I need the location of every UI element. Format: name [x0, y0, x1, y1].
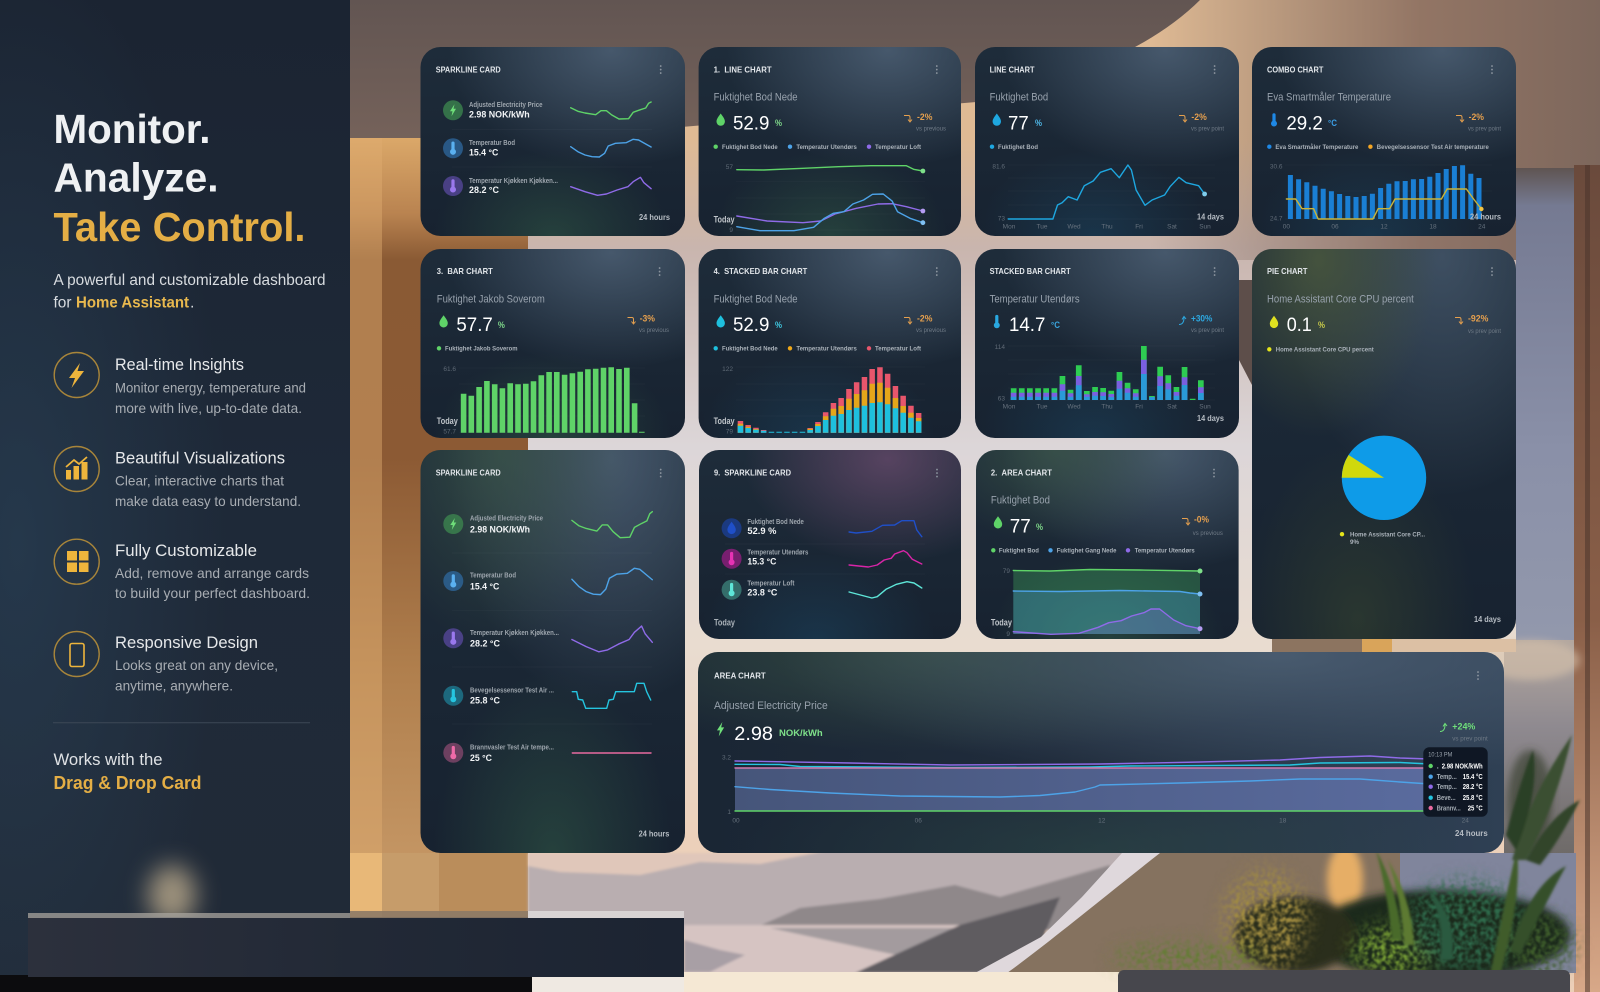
stacked bar chart: Tue	[1037, 404, 1048, 411]
feature: responsive design	[54, 632, 278, 694]
combo chart: 12	[1380, 223, 1388, 230]
footer: 24 hours	[639, 829, 670, 839]
legend: Fuktighet Gang Nede	[1057, 548, 1117, 555]
menu	[660, 470, 662, 477]
area chart: Today	[991, 617, 1012, 627]
heading: PIE CHART	[1267, 266, 1308, 276]
tooltip: Brannv...	[1437, 805, 1461, 812]
feature: fully customizable: Fully Customizable	[115, 541, 257, 560]
stacked bar chart: Mon	[1003, 404, 1016, 411]
stacked bar chart: Today	[714, 416, 735, 426]
row: brannvasler: 25 °C	[470, 753, 492, 764]
trend: vs prev point	[1452, 736, 1488, 743]
menu	[1477, 672, 1479, 679]
menu	[936, 268, 938, 275]
trend: vs prev point	[1468, 328, 1501, 335]
name: Fuktighet Bod Nede	[714, 92, 798, 104]
value: °C	[1051, 320, 1060, 330]
legend: Fuktighet Bod Nede	[722, 144, 778, 151]
name: Home Assistant Core CPU percent	[1267, 293, 1414, 305]
heading: LINE CHART	[990, 64, 1035, 74]
value: %	[498, 320, 505, 330]
panel: tall sparkline card	[420, 450, 685, 853]
heading: 9. SPARKLINE CARD	[714, 468, 791, 478]
feature: beautiful visualizations	[54, 446, 301, 509]
value	[1271, 113, 1337, 134]
legend	[714, 346, 922, 353]
value: %	[775, 118, 782, 128]
stacked bar chart	[714, 366, 925, 436]
heading	[54, 106, 306, 250]
row: temperature bod	[443, 568, 652, 595]
line chart: 9	[729, 227, 733, 234]
trend	[1455, 314, 1501, 335]
legend: Fuktighet Bod	[998, 144, 1038, 151]
feature: beautiful visualizations: make data easy to understand.	[115, 493, 301, 509]
value	[1270, 315, 1325, 336]
row: temperatur utendørs	[722, 549, 922, 569]
area chart: 79	[1003, 568, 1010, 575]
row: brannvasler	[443, 743, 651, 764]
stacked bar chart: 122	[722, 366, 733, 373]
row: electricity: Adjusted Electricity Price	[470, 516, 543, 523]
heading: COMBO CHART	[1267, 64, 1324, 74]
subheading	[54, 272, 326, 312]
works with: Works with the	[54, 750, 162, 769]
footer: 24 hours	[1470, 211, 1501, 221]
feature: fully customizable: Add, remove and arrange cards	[115, 565, 309, 581]
trend: vs previous	[1193, 530, 1223, 537]
trend: -2%	[917, 112, 933, 123]
combo chart: 06	[1331, 223, 1339, 230]
legend	[714, 144, 922, 151]
feature: responsive design: anytime, anywhere.	[115, 678, 233, 694]
legend	[1267, 143, 1489, 151]
panel: wide area chart	[698, 652, 1504, 853]
trend: -2%	[1191, 112, 1207, 123]
line chart: Fri	[1135, 223, 1143, 230]
footer: 24 hours	[639, 212, 670, 222]
value: 77	[1008, 113, 1029, 134]
legend: Eva Smartmåler Temperature	[1275, 143, 1359, 151]
value	[439, 315, 505, 336]
feature: real-time insights	[54, 352, 306, 416]
menu	[936, 66, 938, 73]
row: temperatur utendørs: 15.3 °C	[747, 557, 777, 568]
row: temperatur loft: 23.8 °C	[747, 588, 778, 599]
menu	[1214, 268, 1216, 275]
value: 52.9	[733, 315, 769, 336]
legend: Temperatur Utendørs	[796, 346, 857, 353]
row: temperature kjøkken: 28.2 °C	[470, 638, 500, 649]
legend: Temperatur Utendørs	[796, 144, 857, 151]
value: %	[1036, 522, 1043, 532]
value: 14.7	[1009, 315, 1045, 336]
name: Fuktighet Bod	[991, 494, 1050, 506]
trend: -92%	[1468, 314, 1489, 325]
value: %	[1035, 118, 1042, 128]
value: 0.1	[1287, 315, 1312, 336]
line chart	[714, 164, 925, 234]
name: Fuktighet Bod	[990, 92, 1048, 104]
area chart: 00	[732, 818, 740, 825]
feature: fully customizable	[54, 539, 310, 601]
combo chart: 18	[1429, 223, 1437, 230]
feature: real-time insights: more with live, up-to-date data.	[115, 400, 302, 416]
tooltip: 28.2 °C	[1463, 783, 1483, 791]
trend	[1179, 314, 1224, 334]
legend: Home Assistant Core CPU percent	[1276, 347, 1374, 354]
value	[717, 722, 823, 745]
legend: Temperatur Utendørs	[1135, 548, 1195, 555]
name: Fuktighet Jakob Soverom	[437, 293, 545, 305]
legend	[991, 548, 1195, 555]
counter block	[28, 911, 684, 977]
stacked bar chart: 114	[995, 344, 1005, 351]
tooltip: .	[1437, 763, 1439, 770]
stacked bar chart: Wed	[1067, 404, 1081, 411]
heading: 2. AREA CHART	[991, 468, 1053, 478]
row: temperatur loft: Temperatur Loft	[747, 581, 795, 588]
row: temperature bod: Temperatur Bod	[470, 573, 516, 580]
heading: Analyze.	[54, 155, 218, 201]
works with: Drag & Drop Card	[54, 773, 202, 793]
line chart: Thu	[1101, 223, 1113, 230]
name: Eva Smartmåler Temperature	[1267, 92, 1391, 104]
row: temperatur loft	[722, 580, 922, 600]
trend: vs previous	[916, 125, 947, 132]
trend: -0%	[1194, 515, 1209, 526]
value	[993, 113, 1042, 134]
row: temperature kjøkken	[443, 626, 652, 652]
panel: 1. line chart	[699, 47, 961, 236]
feature: beautiful visualizations: Beautiful Visualizations	[115, 448, 285, 467]
value: 29.2	[1286, 113, 1323, 134]
combo chart: 00	[1283, 223, 1290, 230]
value: %	[775, 320, 782, 330]
line chart: Mon	[1003, 223, 1016, 230]
footer: Today	[714, 617, 735, 627]
feature: responsive design: Looks great on any device,	[115, 657, 278, 673]
value	[716, 113, 782, 134]
menu	[660, 66, 662, 73]
panel: line chart	[975, 47, 1239, 236]
footer: 14 days	[1474, 614, 1501, 624]
plants	[1112, 735, 1580, 992]
legend: Fuktighet Bod Nede	[722, 346, 778, 353]
feature: real-time insights: Real-time Insights	[115, 355, 244, 374]
subheading: Home Assistant	[76, 295, 190, 312]
tooltip: Temp...	[1437, 774, 1457, 781]
value: 77	[1010, 517, 1031, 538]
trend: vs previous	[639, 327, 670, 334]
area chart: 18	[1279, 818, 1287, 825]
trend: vs prev point	[1191, 327, 1224, 334]
row: temperature kjøkken: Temperatur Kjøkken Kjøkken...	[470, 630, 559, 637]
row: electricity	[443, 512, 652, 538]
tooltip: 10:13 PM	[1428, 752, 1452, 759]
area chart: 24	[1462, 818, 1469, 825]
trend	[904, 314, 947, 334]
line chart: 57	[726, 164, 733, 171]
feature: responsive design: Responsive Design	[115, 633, 258, 652]
area chart: 3.2	[722, 754, 731, 762]
bar chart: 61.6	[443, 366, 456, 373]
trend: -2%	[917, 314, 933, 325]
tooltip: 2.98 NOK/kWh	[1442, 763, 1483, 770]
menu	[1213, 470, 1215, 477]
area chart: 1	[727, 809, 731, 816]
works with	[54, 750, 202, 793]
menu	[1491, 66, 1493, 73]
row: temperature bod: 15.4 °C	[470, 581, 499, 592]
trend: vs prev point	[1191, 125, 1224, 132]
name: Adjusted Electricity Price	[714, 700, 828, 712]
stacked bar chart: 79	[726, 428, 733, 436]
stacked bar chart	[995, 344, 1215, 411]
value: 2.98	[734, 724, 773, 745]
trend	[1456, 112, 1501, 132]
heading: 3. BAR CHART	[437, 266, 494, 276]
value	[716, 315, 782, 336]
stacked bar chart: Thu	[1101, 404, 1113, 411]
name: Temperatur Utendørs	[990, 293, 1080, 305]
line chart: Sun	[1199, 223, 1211, 230]
heading: STACKED BAR CHART	[990, 266, 1071, 276]
combo chart: 24.7	[1270, 216, 1283, 222]
subheading: A powerful and customizable dashboard	[54, 272, 326, 289]
legend: Temperatur Loft	[875, 144, 922, 151]
trend	[1182, 515, 1223, 537]
heading: Monitor.	[54, 106, 210, 152]
row: temperature kjøkken	[443, 176, 651, 196]
panel: 2. area chart	[976, 450, 1239, 639]
row: fuktighet: 52.9 %	[747, 526, 777, 537]
stacked bar chart: Fri	[1135, 404, 1143, 411]
footer: 14 days	[1197, 413, 1224, 423]
heading: SPARKLINE CARD	[436, 64, 501, 74]
legend: Fuktighet Bod	[999, 548, 1039, 555]
heading: AREA CHART	[714, 670, 766, 680]
value: %	[1318, 320, 1325, 330]
row: brannvasler: Brannvasler Test Air tempe...	[470, 744, 554, 751]
heading: 4. STACKED BAR CHART	[714, 266, 808, 276]
line chart: Today	[714, 214, 735, 224]
heading: 1. LINE CHART	[714, 64, 772, 74]
left panel	[0, 0, 684, 992]
row: temperatur utendørs: Temperatur Utendørs	[747, 550, 808, 557]
combo chart: 30.6	[1270, 164, 1283, 170]
combo chart	[1270, 164, 1492, 230]
name: Fuktighet Bod Nede	[714, 293, 798, 305]
pie chart	[1342, 436, 1426, 520]
area chart: 9	[1006, 631, 1010, 638]
row: electricity: 2.98 NOK/kWh	[469, 110, 530, 121]
combo chart: 24	[1478, 223, 1486, 230]
value: 52.9	[733, 113, 769, 134]
subheading: .	[190, 295, 194, 312]
feature: fully customizable: to build your perfect dashboard.	[115, 585, 310, 601]
line chart	[992, 164, 1215, 230]
panel: pie chart	[1252, 249, 1516, 639]
feature: beautiful visualizations: Clear, interactive charts that	[115, 473, 284, 489]
footer: 14 days	[1197, 211, 1224, 221]
bar chart	[437, 366, 645, 436]
footer: 24 hours	[1455, 828, 1488, 838]
bar chart: Today	[437, 416, 458, 426]
row: temperature bod: Temperatur Bod	[469, 140, 515, 147]
row: fuktighet	[722, 518, 922, 538]
menu	[1214, 66, 1216, 73]
tooltip: 25 °C	[1468, 804, 1483, 812]
area chart: 12	[1098, 818, 1106, 825]
pie legend	[1340, 532, 1425, 546]
tooltip	[1423, 747, 1488, 817]
area chart: 06	[915, 818, 922, 825]
line chart: Tue	[1037, 223, 1048, 230]
line chart: 81.6	[992, 164, 1005, 170]
tooltip: Temp...	[1437, 784, 1457, 791]
row: temperature bod	[443, 138, 651, 159]
panel: sparkline card	[420, 47, 685, 236]
trend: -3%	[640, 314, 655, 325]
heading: SPARKLINE CARD	[436, 468, 501, 478]
subheading: for	[54, 295, 72, 312]
trend: +30%	[1191, 314, 1213, 325]
stacked bar chart: Sat	[1167, 404, 1177, 411]
value: 57.7	[456, 315, 493, 336]
line chart: Sat	[1167, 223, 1177, 230]
mountain range	[528, 850, 1168, 975]
feature: real-time insights: Monitor energy, temperature and	[115, 380, 306, 396]
area chart	[722, 754, 1469, 825]
trend	[1179, 112, 1224, 132]
trend: +24%	[1452, 721, 1476, 732]
row: electricity	[443, 100, 651, 121]
panel: stacked bar chart	[975, 249, 1239, 438]
row: temperature kjøkken: 28.2 °C	[469, 185, 499, 196]
panel: 4. stacked bar chart	[699, 249, 961, 438]
trend: -2%	[1469, 112, 1484, 123]
legend: Fuktighet Jakob Soverom	[445, 346, 518, 353]
trend	[1440, 721, 1488, 743]
menu	[1491, 268, 1493, 275]
trend	[628, 314, 670, 334]
value: NOK/kWh	[779, 728, 823, 738]
row: temperature bod: 15.4 °C	[469, 148, 498, 159]
row: bevegelsessensor	[443, 683, 651, 708]
row: fuktighet: Fuktighet Bod Nede	[747, 519, 804, 526]
legend: Temperatur Loft	[875, 346, 922, 353]
tooltip: Beve...	[1437, 795, 1456, 802]
area chart	[991, 568, 1202, 638]
pie legend: 9%	[1350, 539, 1359, 546]
menu	[659, 268, 661, 275]
value	[994, 315, 1060, 336]
tooltip: 15.4 °C	[1463, 773, 1483, 781]
row: electricity: 2.98 NOK/kWh	[470, 524, 530, 535]
heading: Take Control.	[54, 204, 306, 250]
row: temperature kjøkken: Temperatur Kjøkken Kjøkken...	[469, 178, 558, 185]
bar chart: 57.7	[443, 428, 456, 436]
pie legend: Home Assistant Core CP...	[1350, 532, 1425, 538]
menu	[936, 470, 938, 477]
tooltip: 25.8 °C	[1463, 794, 1483, 802]
panel: 3. bar chart	[420, 249, 685, 438]
trend: vs previous	[916, 327, 947, 334]
line chart: 73	[998, 216, 1005, 222]
line chart: Wed	[1067, 223, 1081, 230]
trend	[904, 112, 947, 132]
value	[994, 516, 1043, 538]
row: bevegelsessensor: 25.8 °C	[470, 696, 500, 707]
panel: 9. sparkline card	[699, 450, 961, 639]
stacked bar chart: 63	[998, 396, 1005, 402]
panel: combo chart	[1252, 47, 1516, 236]
row: bevegelsessensor: Bevegelsessensor Test Air ...	[470, 687, 554, 694]
legend: Bevegelsessensor Test Air temperature	[1377, 144, 1489, 151]
value: °C	[1328, 118, 1337, 128]
trend: vs prev point	[1468, 125, 1501, 132]
row: electricity: Adjusted Electricity Price	[469, 102, 543, 109]
stacked bar chart: Sun	[1199, 404, 1211, 411]
